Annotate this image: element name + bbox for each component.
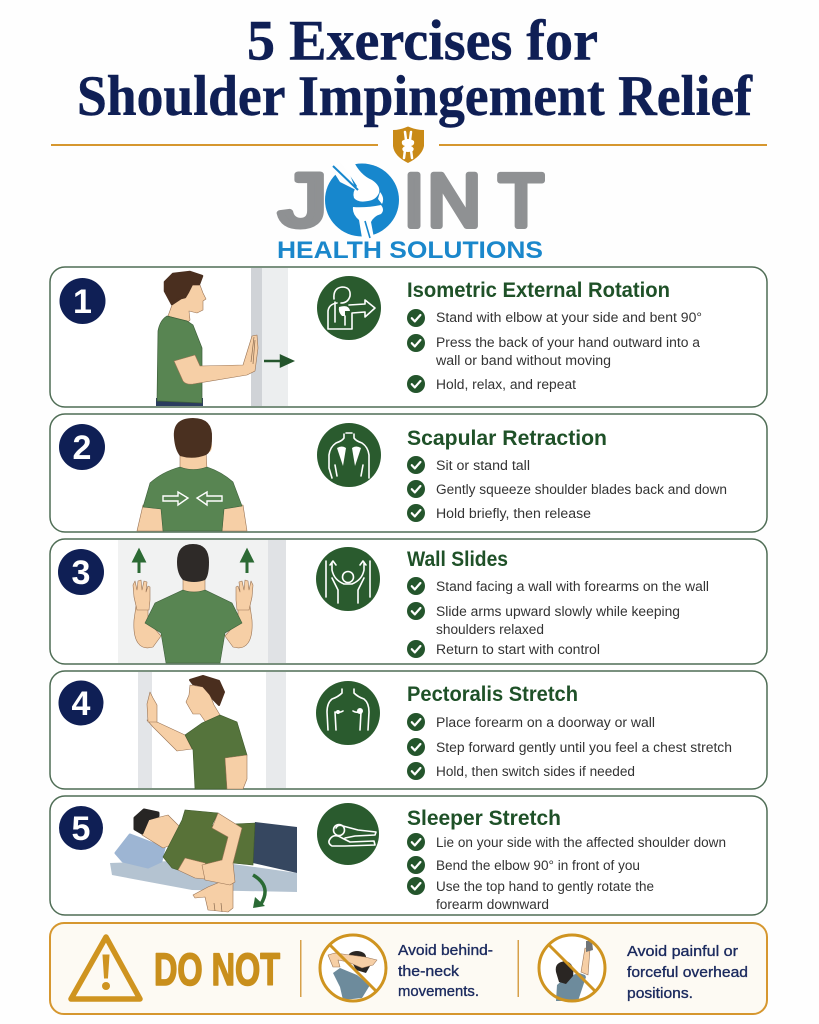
logo: Joint Health Solutions: I xyxy=(404,159,424,242)
icon: lying figure xyxy=(317,803,379,865)
number 5: 5 xyxy=(72,810,90,848)
title: 5 Exercises for xyxy=(247,10,598,72)
steps 3: Slide arms upward slowly while keeping xyxy=(436,604,680,619)
number 2 xyxy=(59,424,105,470)
warning text 1: movements. xyxy=(398,983,479,1000)
panel 5: Sleeper Stretch xyxy=(50,796,767,915)
warning text 1: the-neck xyxy=(398,963,460,980)
steps 2: Gently squeeze shoulder blades back and down xyxy=(436,482,727,497)
number 5 xyxy=(59,806,103,850)
steps 4: Hold, then switch sides if needed xyxy=(436,764,635,779)
heading 4: Pectoralis Stretch xyxy=(407,683,578,706)
icon: no painful overhead xyxy=(539,935,605,1001)
number 1 xyxy=(60,278,106,324)
logo: Joint Health Solutions: N xyxy=(428,159,481,242)
warning text 2: Avoid painful or xyxy=(627,943,738,960)
Do Not label: DO NOT xyxy=(154,944,280,995)
heading 3: Wall Slides xyxy=(407,548,508,571)
warning text 1: Avoid behind- xyxy=(398,942,493,959)
steps 1: Stand with elbow at your side and bent 90° xyxy=(436,310,702,325)
icon: shoulder blades xyxy=(317,423,381,487)
card 2 xyxy=(50,414,767,532)
icon: warning triangle xyxy=(71,937,140,999)
illustration: man from behind squeezing shoulder blades xyxy=(137,418,247,531)
card 4 xyxy=(50,671,767,789)
number 4: 4 xyxy=(72,685,91,723)
steps 3: Return to start with control xyxy=(436,642,600,657)
card 1 xyxy=(50,267,767,407)
warning card xyxy=(50,923,767,1014)
panel: Do Not warning xyxy=(50,923,767,1014)
steps 4 xyxy=(407,713,732,780)
panel 3: Wall Slides xyxy=(50,539,767,664)
steps 1: wall or band without moving xyxy=(435,353,611,368)
illustration: man sliding arms up a wall xyxy=(118,540,286,663)
arrows xyxy=(134,551,252,573)
arrow xyxy=(253,875,265,904)
logo: Joint Health Solutions xyxy=(277,159,544,264)
title xyxy=(77,10,753,128)
icon: external rotation xyxy=(317,276,381,340)
steps 3 xyxy=(407,577,709,658)
icon: no behind-the-neck xyxy=(320,935,386,1001)
steps 2: Sit or stand tall xyxy=(436,458,530,473)
steps 1: Press the back of your hand outward into a xyxy=(436,335,701,350)
steps 5: Use the top hand to gently rotate the xyxy=(436,879,654,894)
warning text 2: forceful overhead xyxy=(627,964,748,981)
number 4 xyxy=(58,680,104,726)
divider with shield emblem xyxy=(51,126,767,163)
number 3: 3 xyxy=(72,554,90,592)
illustration: man pressing hand on wall xyxy=(156,268,292,406)
logo: Joint Health Solutions: T xyxy=(498,159,544,242)
steps 3: Stand facing a wall with forearms on the wall xyxy=(436,579,709,594)
steps 3: shoulders relaxed xyxy=(436,622,544,637)
illustration: man lying on side xyxy=(110,810,297,912)
arrows xyxy=(163,492,222,505)
logo: Joint Health Solutions: HEALTH SOLUTIONS xyxy=(277,237,543,264)
steps 2 xyxy=(407,456,727,522)
warning text 2 xyxy=(627,943,748,1002)
logo: Joint Health Solutions: J xyxy=(279,160,327,242)
panel 2: Scapular Retraction xyxy=(50,414,767,532)
number 3 xyxy=(58,549,104,595)
warning text 1 xyxy=(398,942,493,1000)
number 1: 1 xyxy=(73,283,92,321)
heading 1: Isometric External Rotation xyxy=(407,279,670,302)
steps 1 xyxy=(407,309,702,393)
icon: chest xyxy=(316,681,380,745)
steps 4: Step forward gently until you feel a chest stretch xyxy=(436,740,732,755)
steps 5: forearm downward xyxy=(436,897,549,912)
title: Shoulder Impingement Relief xyxy=(77,65,753,128)
number 2: 2 xyxy=(73,429,91,467)
steps 4: Place forearm on a doorway or wall xyxy=(436,715,655,730)
card 3 xyxy=(50,539,767,664)
card 5 xyxy=(50,796,767,915)
steps 1: Hold, relax, and repeat xyxy=(436,377,576,392)
steps 2: Hold briefly, then release xyxy=(436,506,591,521)
heading 5: Sleeper Stretch xyxy=(407,807,561,830)
panel 1: Isometric External Rotation xyxy=(50,267,767,407)
steps 5: Bend the elbow 90° in front of you xyxy=(436,858,640,873)
heading 2: Scapular Retraction xyxy=(407,427,607,450)
warning text 2: positions. xyxy=(627,985,693,1002)
arrow xyxy=(264,356,292,366)
steps 5 xyxy=(407,833,726,912)
icon: wall slide figure xyxy=(316,547,380,611)
panel 4: Pectoralis Stretch xyxy=(50,671,767,789)
steps 5: Lie on your side with the affected shoulder down xyxy=(436,835,726,850)
illustration: man stretching chest in doorway xyxy=(138,672,286,789)
